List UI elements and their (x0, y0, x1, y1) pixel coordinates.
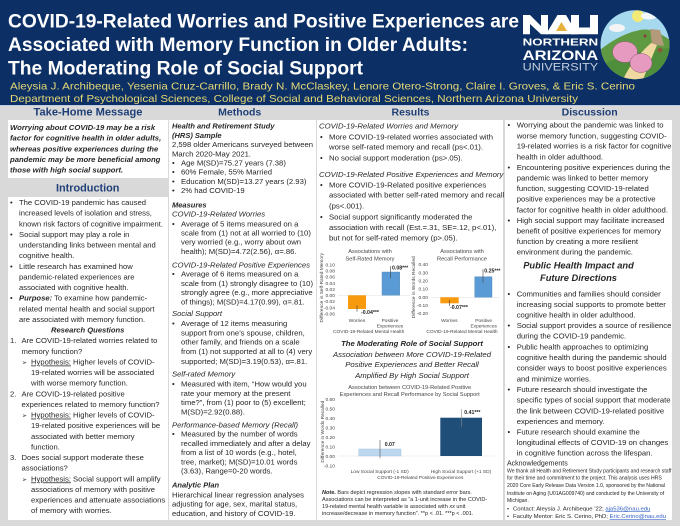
panel: introduction: associated with cognitive health. (19, 283, 129, 292)
discussion bullets: function by creating a more resilient (517, 237, 639, 246)
future directions bullets: longitudinal effects of COVID-19 on changes (517, 438, 668, 447)
bar chart: recall by social support: 0.07 (385, 442, 395, 448)
bar chart: recall by social support: 0.30 (325, 426, 335, 432)
methods: measures: Self-rated Memory (172, 370, 236, 379)
panel: introduction: pandemic-related experiences are (19, 272, 135, 281)
panel: take-home message (8, 120, 168, 178)
bar chart: self-rated memory: 0.00 (325, 293, 335, 299)
NAU logo: NORTHERN (523, 38, 598, 49)
methods: analytic plan: Analytic Plan (171, 481, 220, 490)
moderation heading: The Moderating Role of Social Support (341, 339, 483, 348)
NAU logo (523, 15, 599, 74)
methods: sample (172, 121, 313, 195)
research questions: experiences related to memory function? (22, 400, 160, 409)
bar chart: self-rated memory: 0.10 (325, 262, 335, 268)
research questions: Hypothesis: Social support will amplify (31, 474, 161, 483)
methods: measures: from (1) not supported at all to (4) very (181, 347, 312, 356)
methods: measures: COVID-19-Related Positive Experiences (172, 260, 310, 269)
research questions: memory function? (22, 347, 82, 356)
future directions bullets: specific types of social support that moderate (517, 396, 671, 405)
heading: Introduction: Introduction (56, 182, 119, 194)
note (322, 490, 487, 517)
methods: measures: recalled immediately and after a delay (181, 439, 311, 448)
moderation heading (332, 339, 492, 380)
authors and affiliation (10, 82, 635, 105)
methods: analytic plan: education, and history of COVID-19. (172, 509, 296, 518)
bar chart: recall by social support: Difference in Words Recalled (320, 400, 326, 463)
discussion bullets (508, 121, 671, 257)
bar chart: self-rated memory: 0.04 (325, 281, 335, 287)
future directions bullets: Future research should investigate the (517, 385, 647, 394)
bar chart: recall by social support: 0.50 (325, 407, 335, 413)
methods: measures: supported; M(SD)=3.19(0.53), α=.81. (181, 357, 307, 366)
bar chart: recall by social support: 0.20 (325, 435, 335, 441)
bar chart: recall performance: COVID-19-Related Mental Health (426, 329, 498, 335)
panel: take-home message: Worrying about COVID-19 may be a risk (10, 123, 156, 132)
future directions bullets: • (508, 321, 510, 330)
research questions: Research Questions (51, 326, 124, 335)
methods: measures: • (172, 270, 175, 279)
bar chart: recall by social support: High Social Support (+1 SD) (431, 469, 492, 475)
methods: sample: • (172, 168, 175, 177)
bar chart: recall by social support: 0.60 (325, 397, 335, 403)
methods: measures: Measured by the number of words (181, 430, 298, 439)
title: The Moderating Role of Social Support (8, 58, 364, 79)
research questions: associated with better memory (31, 432, 135, 441)
methods: analytic plan: adjusting for age, sex, marital status, (172, 500, 297, 509)
bar chart: recall by social support: Low Social Support (-1 SD) (351, 469, 409, 475)
bar chart: recall performance: 0.10 (418, 287, 428, 293)
discussion bullets: health in older adulthood. (517, 152, 603, 161)
future directions bullets: cognitive health in older adulthood. (517, 311, 636, 320)
research questions: of memory with worries. (31, 506, 112, 515)
discussion bullets: 19-related worries is a risk factor for cognitive (517, 142, 671, 151)
panel: introduction: • (10, 198, 13, 207)
methods: analytic plan: Hierarchical linear regression analyses (172, 491, 304, 500)
discussion bullets: function, suggesting COVID-19-related (517, 184, 649, 193)
panel: take-home message: factor for cognitive health in older adults, (10, 134, 161, 143)
methods: measures: Average of 5 items measured on a (181, 219, 299, 228)
methods: measures: very worried (e.g., worry about own (181, 238, 301, 247)
future directions bullets: • (508, 385, 510, 394)
bar chart: recall by social support: Association between COVID-19-Related Positive (348, 385, 471, 391)
panel: introduction: known risk factors of cognitive impairment. (19, 219, 163, 228)
research questions: ➢ (22, 360, 27, 366)
bar chart: recall by social support: 0.40 (325, 416, 335, 422)
title: Associated with Memory Function in Older Adults: (8, 35, 468, 56)
methods: measures: Performance-based Memory (Recall) (172, 420, 298, 429)
results: worries text: No social support moderation (ps>.05). (329, 153, 463, 162)
methods: measures: • (172, 430, 175, 439)
bar chart: recall performance: 0.20 (418, 278, 428, 284)
panel: introduction: • (10, 262, 13, 271)
note: Note. Bars depict regression slopes with standard error bars. (322, 490, 472, 496)
methods: measures: tree, market); M(SD)=10.01 words (181, 457, 298, 466)
discussion bullets: Worrying about the pandemic was linked to (517, 121, 664, 130)
bar chart: recall by social support: COVID-19-Related Positive Experiences (377, 475, 464, 481)
panel: introduction: understanding links between mental and (19, 240, 156, 250)
results: positive experiences text: • (320, 212, 323, 221)
methods: sample: 60% Female, 55% Married (181, 168, 272, 177)
bar chart: self-rated memory: Positive (382, 318, 399, 324)
methods: sample: (HRS) Sample (172, 131, 222, 140)
panel: introduction: are associated with memory function. (19, 315, 145, 324)
panel: methods (169, 120, 316, 520)
methods: measures: M(SD)=2.92(0.88). (181, 407, 245, 416)
future directions bullets: Public health approaches to optimizing (517, 342, 648, 351)
discussion bullets: • (508, 216, 510, 225)
bar chart: recall performance: Experiences (470, 324, 497, 330)
methods: sample: Age M(SD)=75.27 years (7.38) (181, 159, 286, 168)
bar chart: recall performance: 0.25*** (484, 268, 501, 274)
methods: measures: scale from (1) not at all worried to (10) (181, 229, 311, 238)
discussion bullets: • (508, 163, 510, 172)
bar chart: recall performance: 0.00 (418, 295, 428, 301)
title: COVID-19-Related Worries and Positive Experiences are (8, 12, 519, 33)
research questions: Hypothesis: Higher levels of COVID- (31, 358, 155, 366)
bar chart: recall by social support (320, 385, 495, 481)
research questions: associations? (22, 464, 68, 473)
research questions: 19-related positive experiences will be (31, 421, 160, 430)
results: positive experiences text: associated with better self-rated memory and recall (329, 191, 505, 200)
research questions: 2. (10, 389, 16, 398)
panel: introduction: increased levels of isolation and stress, (19, 209, 152, 218)
contact details: • (507, 514, 509, 520)
research questions: experiences and attenuate associations (31, 496, 165, 505)
bar chart: self-rated memory: -0.02 (324, 299, 335, 305)
methods: measures (172, 200, 313, 475)
results: worries text (319, 121, 493, 162)
bar chart: recall performance: -0.20 (417, 311, 428, 317)
future directions bullets: increasing social supports to promote better (517, 300, 666, 309)
panel: take-home message: those with high social support. (10, 166, 123, 175)
title (8, 12, 519, 79)
bar chart: recall performance: Associations with (440, 249, 484, 255)
discussion bullets: pandemic was linked to better memory (517, 174, 648, 183)
methods: sample: 2% had COVID-19 (181, 186, 245, 195)
discussion bullets: • (508, 121, 510, 130)
research questions: with worse memory function. (30, 379, 128, 388)
methods: measures: • (172, 219, 175, 228)
methods: measures: Average of 6 items measured on a (181, 270, 299, 279)
bar chart: self-rated memory: 0.08*** (392, 266, 409, 272)
acknowledgements (507, 460, 672, 504)
results: positive experiences text: COVID-19-Related Positive Experiences and Memory (319, 170, 504, 179)
research questions: Does social support moderate these (22, 453, 144, 462)
heading: public health impact (523, 260, 634, 283)
bar chart: recall performance: 0.40 (418, 262, 428, 268)
bar chart: recall by social support: Experiences and Recall Performance by Social Support (340, 392, 480, 398)
heading: Discussion: Discussion (562, 106, 618, 118)
bar chart: self-rated memory: 0.02 (325, 287, 335, 293)
future directions bullets: • (508, 289, 510, 298)
methods: measures: Average of 12 items measuring (181, 319, 287, 328)
acknowledgements: Institute on Aging (U01AG009740) and conducted by the University of (507, 491, 665, 497)
contact details: Contact: Aleysia J. Archibeque ’22; aja536@nau.edu (513, 506, 650, 512)
heading: public health impact: Public Health Impact and (523, 260, 634, 270)
bar chart: recall by social support: 0.00 (325, 454, 335, 460)
bar chart: recall performance: -0.07*** (450, 305, 469, 311)
bar chart: self-rated memory: Experiences (377, 324, 404, 330)
bar chart: self-rated memory: -0.06 (324, 312, 335, 318)
methods: sample: Health and Retirement Study (172, 121, 275, 130)
discussion bullets: factor for cognitive health in older adulthood. (517, 205, 668, 214)
methods: measures: scale from (1) strongly disagree to (10) (181, 279, 313, 288)
panel: introduction: Social support may play a role in (19, 230, 129, 239)
results: positive experiences text: (ps<.001). (329, 201, 364, 210)
bar chart: self-rated memory: Worries (349, 318, 366, 324)
bar chart: self-rated memory: -0.04*** (361, 310, 380, 316)
methods: measures: time?”, from (1) poor to (5) excellent; (181, 398, 306, 407)
future directions bullets: cognitive health during the pandemic should (517, 353, 667, 362)
acknowledgements: 2020 Core Early Release Data Version 1.0, sponsored by the National (507, 483, 665, 489)
methods: measures: (3.63), Range=0-20 words. (181, 466, 273, 475)
authors and affiliation: Department of Psychological Sciences, College of Social and Behavioral Sciences, Northern Arizona University (10, 94, 579, 105)
future directions bullets (508, 289, 671, 458)
heading: Take-Home Message: Take-Home Message (34, 106, 142, 118)
panel: results (317, 120, 505, 520)
methods: measures: of things); M(SD)=4.17(0.99), α=.81. (181, 297, 305, 306)
bar chart: self-rated memory: 0.06 (325, 275, 335, 281)
future directions bullets: • (508, 342, 510, 351)
research questions: 3. (10, 453, 16, 462)
bar chart: recall performance: -0.10 (417, 303, 428, 309)
contact details: Faculty Mentor: Eric S. Cerino, PhD; Eric.Cerino@nau.edu (513, 514, 666, 520)
panel: introduction (8, 197, 168, 520)
results: positive experiences text: association with recall (Est.=.31, SE=.12, p<.01), (329, 223, 496, 232)
methods: measures: • (172, 380, 175, 389)
research questions: Hypothesis: Higher levels of COVID- (31, 411, 155, 420)
methods: analytic plan (171, 481, 304, 518)
methods: measures: • (172, 319, 175, 328)
future directions bullets: consider ways to boost positive experiences (517, 364, 667, 373)
methods: measures: support from one’s spouse, children, (181, 329, 305, 338)
acknowledgements: We thank all Health and Retirement Study participants and research staff (507, 468, 672, 474)
bar chart: recall performance: 0.30 (418, 270, 428, 276)
future directions bullets: the link between COVID-19-related positive (517, 406, 664, 415)
bar chart: recall by social support: 0.41*** (464, 410, 481, 416)
panel: introduction: The COVID-19 pandemic has caused (19, 198, 146, 207)
results: positive experiences text: More COVID-19-Related positive experiences (329, 181, 486, 190)
panel: section header band (0, 105, 680, 118)
acknowledgements: for their time and commitment to the project. This analysis uses HRS (507, 476, 662, 482)
methods: measures: strongly agree (e.g., more appreciative (181, 288, 313, 297)
acknowledgements: Michigan. (507, 498, 529, 504)
panel: introduction: • (10, 230, 13, 239)
future directions bullets: Communities and families should consider (517, 289, 661, 298)
bar chart: recall by social support: 0.10 (325, 445, 335, 451)
methods: measures: from a list of 10 words (e.g., hotel, (181, 448, 297, 457)
results: positive experiences text: • (320, 181, 323, 190)
moderation heading: Association between More COVID-19-Related (332, 350, 492, 359)
moderation heading: Amplified By High Social Support (354, 371, 470, 380)
future directions bullets: in cognitive function across the lifespan. (517, 449, 653, 458)
panel: take-home message: whereas positive experiences during the (10, 144, 159, 153)
future directions bullets: Social support provides a source of resilience (517, 321, 671, 330)
results: positive experiences text: Social support significantly moderated the (329, 212, 472, 221)
moderation heading: Positive Experiences and Better Recall (345, 360, 479, 369)
results: worries text: More COVID-19-related worries associated with (329, 132, 493, 141)
results: positive experiences text: but not for self-rated memory (p>.05). (329, 234, 458, 243)
methods: measures: other family, and friends on a scale (181, 338, 300, 347)
research questions: ➢ (22, 414, 27, 420)
research questions: ➢ (22, 477, 27, 483)
methods: measures: Social Support (172, 309, 223, 318)
methods: sample: • (172, 159, 175, 168)
discussion bullets: environment during the pandemic. (517, 248, 633, 257)
results: worries text: worse self-rated memory and recall (ps<.01). (328, 143, 483, 152)
authors and affiliation: Aleysia J. Archibeque, Yesenia Cruz-Carrillo, Brady N. McClaskey, Lenore Otero-Strong, Claire I. Groves, & Eric S. Cerino (10, 82, 635, 92)
panel: discussion (505, 120, 672, 520)
bar chart: recall by social support: -0.10 (324, 464, 335, 470)
NAU logo: ARIZONA (523, 48, 599, 63)
methods: sample: 2,598 older Americans surveyed between (172, 140, 313, 149)
research questions: Are COVID-19-related positive (22, 389, 125, 398)
future directions bullets: during the COVID-19 pandemic. (517, 332, 626, 341)
bar chart: recall performance: Difference in Words Recalled (411, 256, 417, 318)
bar chart: self-rated memory: Self-Rated Memory (346, 256, 395, 262)
future directions bullets: and minimize worries. (517, 374, 591, 383)
bar chart: recall performance (411, 249, 501, 335)
note: 19-related mental health variable is associated with xx unit (322, 504, 466, 510)
research questions: Are COVID-19-related worries related to (22, 336, 157, 345)
note: increase/decrease in memory function”. **p < .01. ***p < .001. (322, 511, 474, 517)
bar chart: self-rated memory: Associations with (348, 249, 392, 255)
discussion bullets: positive experiences may be a protective (517, 195, 656, 204)
methods: measures: Measures (172, 200, 207, 209)
panel: introduction: cognitive health. (19, 251, 74, 260)
panel: take-home message: pandemic may be more beneficial among (9, 155, 161, 164)
panel: introduction: related mental health and social support (19, 304, 155, 313)
discussion bullets: Encountering positive experiences during the (517, 163, 670, 172)
methods: measures: rate your memory at the present (181, 389, 291, 398)
bar chart: recall performance: Worries (441, 318, 458, 324)
contact details: • (507, 506, 509, 512)
future directions bullets: Future research should examine the (517, 427, 640, 436)
bar chart: self-rated memory: Difference in Self-Rated Memory (319, 252, 325, 322)
bar chart: recall performance: Positive (475, 318, 492, 324)
results: positive experiences text (319, 170, 505, 243)
methods: measures: COVID-19-Related Worries (172, 210, 265, 219)
heading: Methods: Methods (218, 106, 261, 118)
methods: measures: Measured with item, “How would you (181, 380, 307, 389)
future directions bullets: experiences and memory. (517, 417, 605, 426)
acknowledgements: Acknowledgements (507, 460, 568, 468)
methods: sample: • (172, 177, 175, 186)
icon: brains on a path landscape (600, 9, 670, 82)
methods: sample: • (172, 186, 175, 195)
panel: introduction: Purpose: To examine how pandemic- (19, 294, 148, 303)
results: worries text: COVID-19-Related Worries and Memory (319, 121, 459, 130)
discussion bullets: worse memory function, suggesting COVID- (516, 131, 667, 140)
research questions: associations of memory with positive (31, 485, 155, 494)
discussion bullets: benefit of positive experiences for memory (517, 227, 661, 236)
discussion bullets: High social support may facilitate increased (517, 216, 665, 225)
NAU logo: UNIVERSITY (523, 62, 598, 74)
header banner (0, 0, 680, 105)
bar chart: recall performance: Recall Performance (437, 256, 487, 262)
panel: introduction: • (10, 294, 13, 303)
note: Associations can be interpreted as “a 1-unit increase in the COVID- (322, 497, 487, 503)
results: worries text: • (320, 153, 323, 162)
heading: Results: Results (392, 106, 430, 118)
methods: measures: health); M(SD)=4.72(2.56), α=.86. (181, 247, 297, 256)
methods: sample: March 2020-May 2021. (172, 149, 251, 158)
heading: public health impact: Future Directions (540, 273, 617, 283)
future directions bullets: • (508, 427, 510, 436)
methods: sample: Education M(SD)=13.27 years (2.93) (181, 177, 307, 186)
results: worries text: • (320, 132, 323, 141)
research questions: 19-related worries will be associated (31, 368, 154, 377)
panel: introduction: Little research has examined how (19, 262, 133, 271)
bar chart: self-rated memory: COVID-19-Related Mental Health (333, 329, 405, 335)
research questions (10, 326, 165, 515)
bar chart: self-rated memory: 0.08 (325, 269, 335, 275)
bar chart: self-rated memory: -0.04 (324, 305, 335, 311)
contact details (507, 506, 666, 520)
research questions: function. (31, 442, 60, 452)
research questions: 1. (10, 336, 16, 345)
bar chart: self-rated memory (319, 249, 410, 335)
